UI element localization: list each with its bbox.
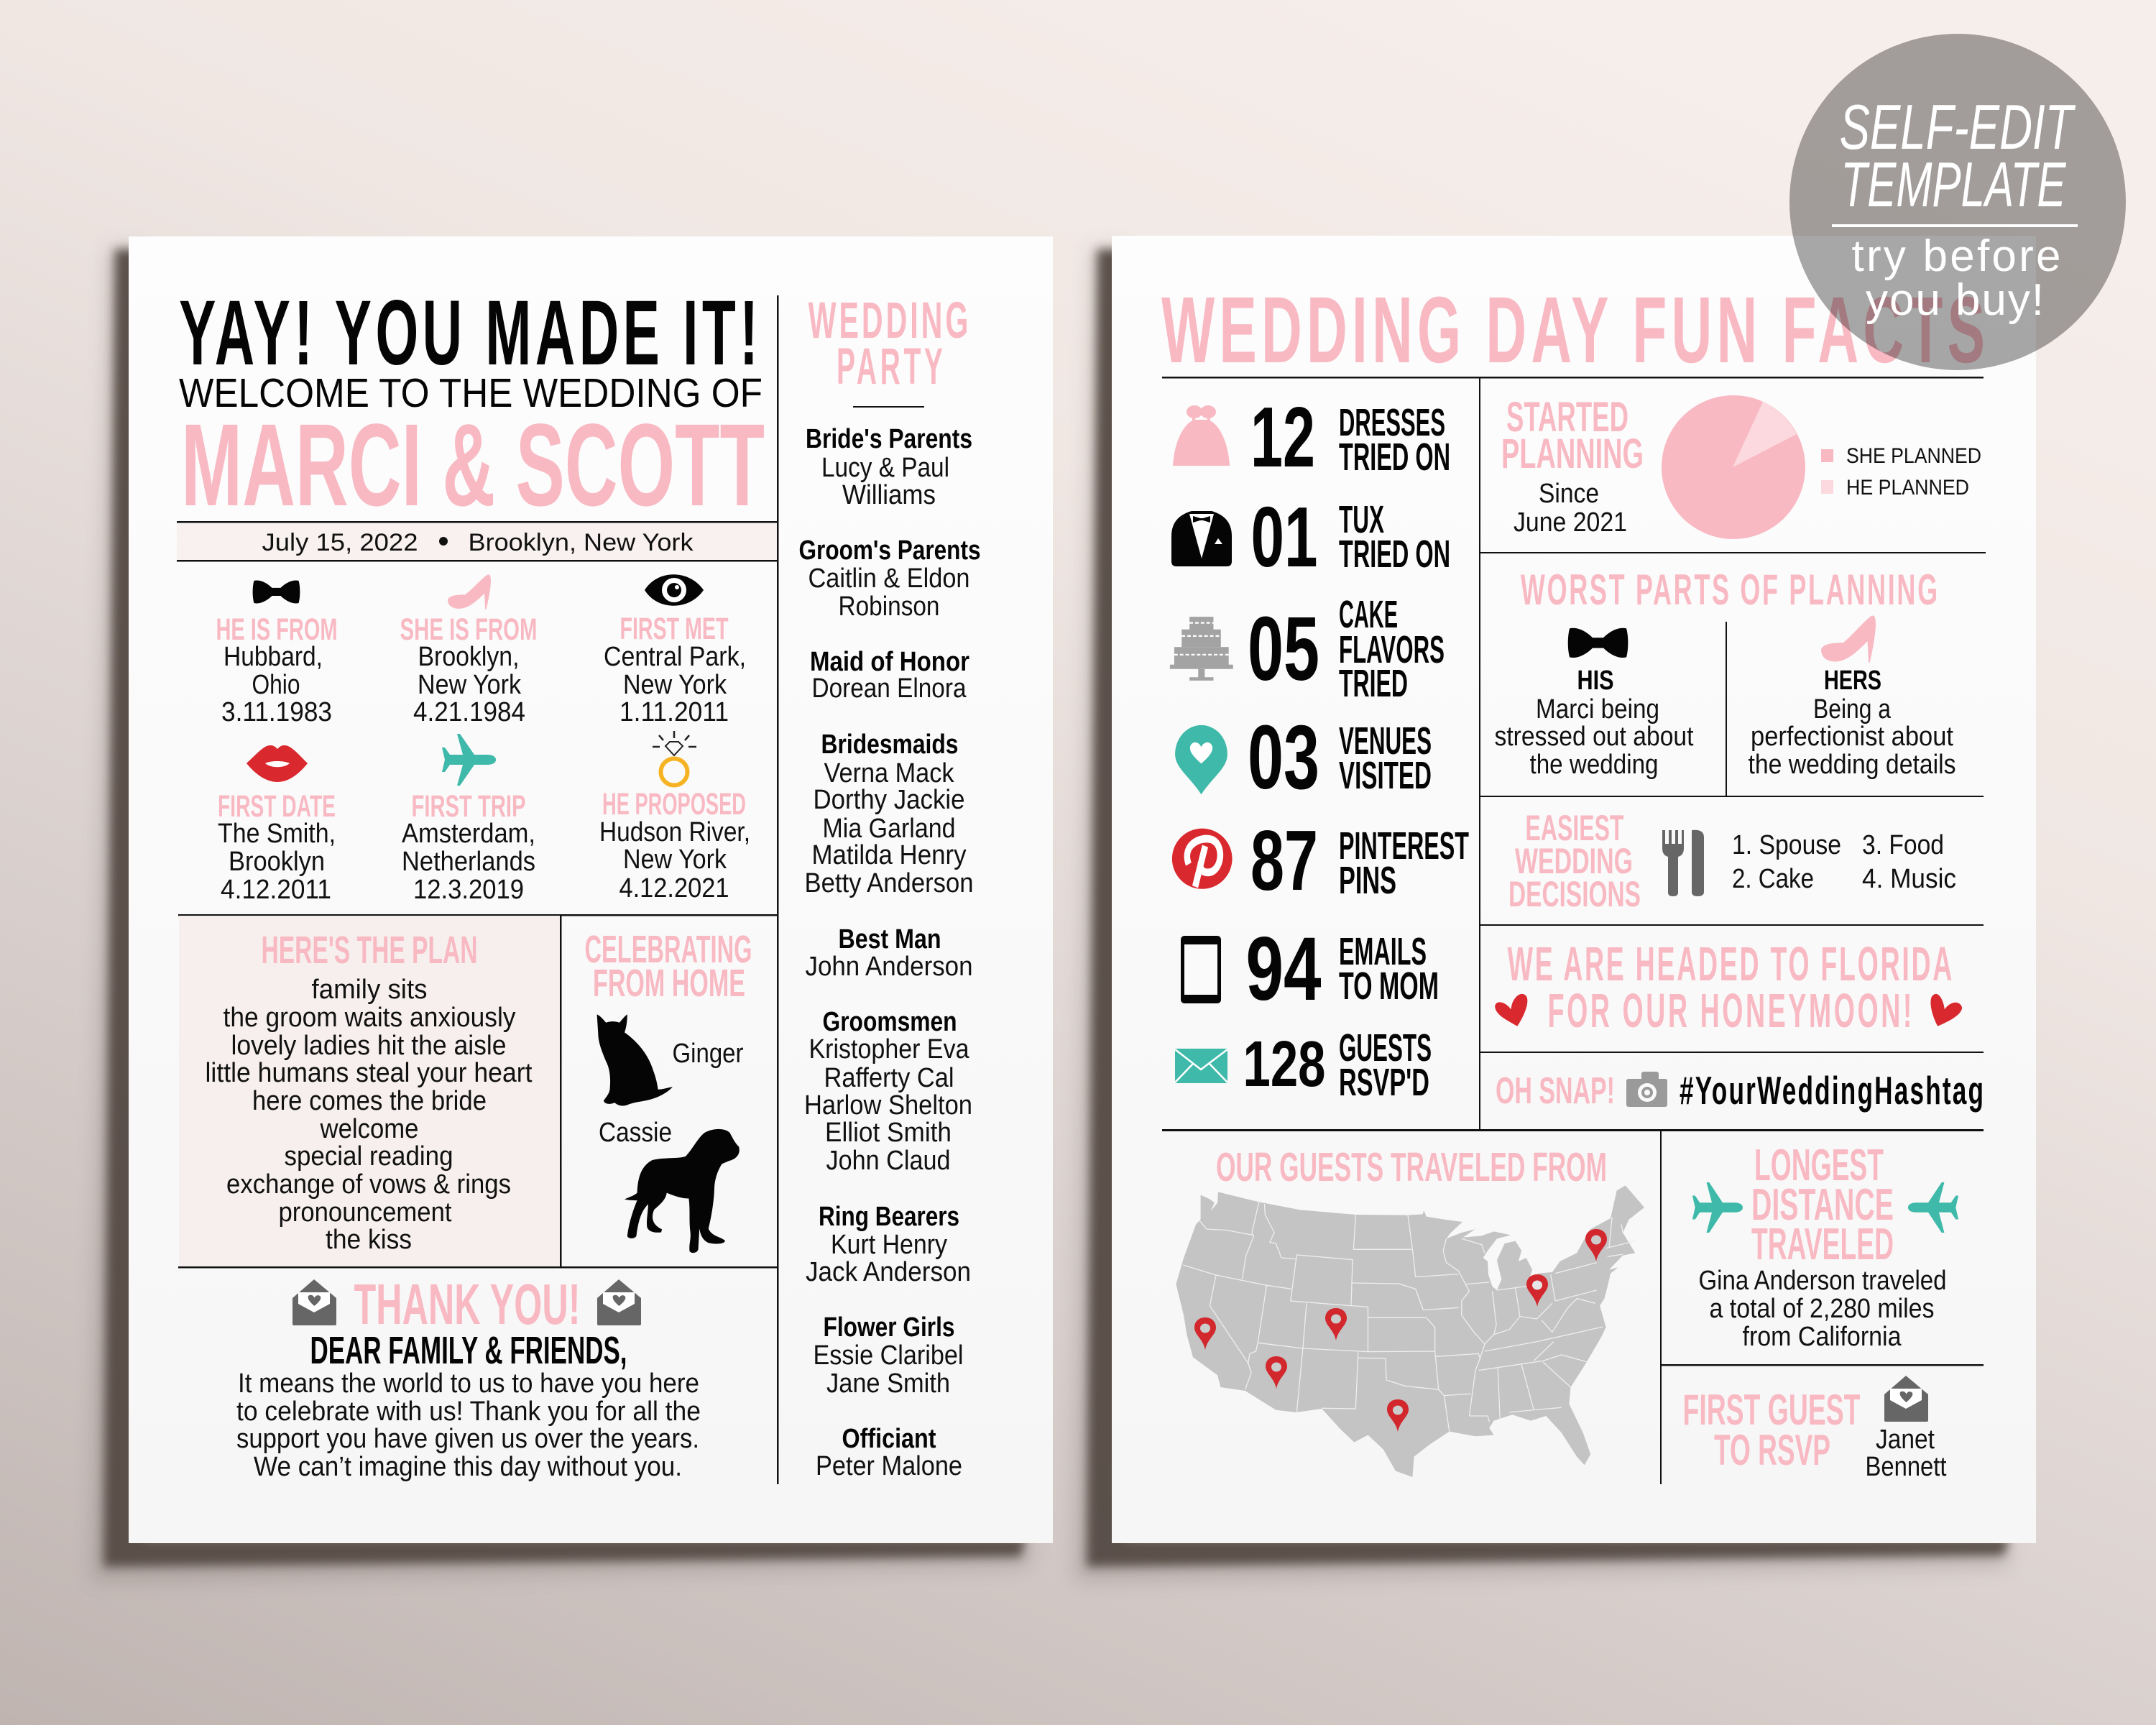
panel: celebrating from home: Cassie: [599, 1118, 672, 1148]
stat: emails to mom: 94: [1246, 919, 1321, 1019]
stat: emails to mom: TO MOM: [1339, 965, 1439, 1008]
facts: he is from: HE IS FROM: [216, 612, 338, 647]
facts: first date: FIRST DATE: [218, 789, 336, 824]
title block: MARCI & SCOTT: [181, 399, 765, 530]
panel: wedding party: Ring Bearers: [819, 1202, 959, 1232]
panel: wedding party: Jack Anderson: [806, 1257, 971, 1287]
facts: she is from: SHE IS FROM: [400, 612, 538, 647]
map pin: arizona: [1266, 1356, 1287, 1389]
stat: cake flavors tried: 05: [1248, 598, 1319, 699]
map pin: colorado: [1325, 1308, 1347, 1340]
panel: here's the plan: welcome: [320, 1114, 418, 1144]
facts: he is from: 3.11.1983: [221, 697, 332, 727]
panel: our guests traveled from: [1176, 1144, 1644, 1477]
panel: easiest wedding decisions: WEDDING: [1515, 841, 1633, 881]
panel: thank you note: THANK YOU!: [354, 1272, 581, 1336]
icon: phone: [1181, 936, 1221, 1003]
icon: high heel: [448, 574, 491, 610]
panel: worst parts of planning: HIS: [1577, 666, 1614, 696]
panel: wedding party: [799, 292, 980, 1481]
panel: thank you note: We can’t imagine this day without you.: [254, 1452, 682, 1482]
panel: honeymoon callout: [1495, 937, 1962, 1038]
facts: he is from: Hubbard,: [224, 642, 323, 672]
icon: camera: [1626, 1072, 1667, 1107]
icon: dress: [1173, 405, 1230, 466]
panel: here's the plan: pronouncement: [279, 1197, 452, 1228]
panel: worst parts of planning: [1495, 566, 1956, 780]
panel: our guests traveled from: OUR GUESTS TRAVELED FROM: [1216, 1144, 1607, 1190]
panel: wedding party: Bride's Parents: [806, 424, 972, 454]
panel: honeymoon callout: WE ARE HEADED TO FLORIDA: [1508, 937, 1952, 991]
panel: wedding party: WEDDING: [808, 292, 968, 349]
facts: first date: Brooklyn: [229, 847, 325, 877]
panel: wedding party: John Claud: [826, 1146, 950, 1176]
left paper sheet: [129, 236, 1053, 1543]
stat: cake flavors tried: FLAVORS: [1339, 628, 1445, 671]
panel: here's the plan: little humans steal your heart: [206, 1058, 533, 1088]
panel: worst parts of planning: the wedding: [1529, 750, 1659, 780]
panel: wedding party: Dorthy Jackie: [814, 785, 964, 815]
icon: high heel: [1821, 615, 1876, 663]
map of the united states: [1176, 1185, 1644, 1477]
panel: wedding party: Kurt Henry: [831, 1230, 947, 1260]
title block: WELCOME TO THE WEDDING OF: [179, 370, 763, 416]
facts: first date: 4.12.2011: [221, 875, 331, 905]
icon: bow tie: [1568, 628, 1628, 658]
panel: thank you note: [236, 1272, 701, 1482]
icon: wedding cake: [1170, 617, 1233, 681]
facts: she is from: New York: [418, 670, 522, 700]
panel: here's the plan: family sits: [312, 975, 427, 1005]
title block: YAY! YOU MADE IT!: [179, 282, 758, 385]
date and location band: July 15, 2022: [262, 529, 418, 556]
panel: wedding party: PARTY: [837, 339, 943, 395]
icon: airplane: [442, 734, 496, 786]
stat: dresses tried on: TRIED ON: [1339, 436, 1450, 479]
panel: wedding party: Essie Claribel: [814, 1340, 963, 1371]
stat: tux tried on: TRIED ON: [1339, 533, 1450, 576]
pie chart: [1662, 395, 1805, 539]
panel: wedding party: Kristopher Eva: [809, 1034, 969, 1064]
stat: venues visited: [1175, 707, 1432, 808]
map pin: ohio: [1526, 1274, 1548, 1307]
panel: wedding party: Mia Garland: [822, 814, 956, 844]
facts: first met: New York: [623, 670, 727, 700]
panel: wedding party: Elliot Smith: [825, 1118, 952, 1148]
panel: here's the plan: the kiss: [326, 1225, 412, 1255]
facts: first met: Central Park,: [604, 642, 746, 672]
title: wedding day fun facts: WEDDING DAY FUN FACTS: [1161, 277, 1985, 382]
stat: guests rsvp'd: GUESTS: [1339, 1026, 1432, 1070]
right paper sheet: [1112, 236, 2036, 1543]
badge: self-edit template: [1789, 34, 2126, 370]
panel: worst parts of planning: HERS: [1824, 666, 1881, 696]
panel: longest distance traveled: DISTANCE: [1751, 1180, 1894, 1230]
panel: wedding party: Officiant: [842, 1424, 936, 1454]
panel: wedding party: Verna Mack: [824, 758, 954, 788]
facts: he proposed: Hudson River,: [599, 817, 750, 847]
stat: dresses tried on: DRESSES: [1339, 401, 1445, 444]
stat: tux tried on: [1171, 489, 1450, 585]
icon: cat silhouette: [597, 1014, 673, 1105]
stat: dresses tried on: [1173, 390, 1450, 485]
panel: first guest to rsvp: TO RSVP: [1714, 1426, 1830, 1474]
icon: pinterest logo: [1172, 829, 1233, 889]
panel: honeymoon callout: FOR OUR HONEYMOON!: [1548, 984, 1912, 1038]
panel: wedding party: Robinson: [838, 592, 940, 622]
panel: celebrating from home: Ginger: [673, 1039, 744, 1069]
panel: easiest wedding decisions: EASIEST: [1525, 808, 1624, 848]
map pin: new york: [1585, 1229, 1607, 1261]
map pin: california: [1194, 1317, 1216, 1350]
panel: first guest to rsvp: Janet: [1876, 1425, 1935, 1455]
panel: here's the plan: the groom waits anxiously: [223, 1003, 516, 1033]
pie legend: SHE PLANNED: [1846, 444, 1981, 468]
panel: thank you note: It means the world to us to have you here: [238, 1368, 699, 1399]
panel: celebrating from home: [585, 928, 752, 1253]
panel: wedding party: Best Man: [838, 924, 941, 954]
panel: first guest to rsvp: FIRST GUEST: [1683, 1386, 1860, 1434]
panel: longest distance traveled: LONGEST: [1754, 1141, 1884, 1190]
icon: mail envelope: [1175, 1049, 1227, 1083]
panel: wedding party: Harlow Shelton: [804, 1090, 972, 1121]
panel: longest distance traveled: [1692, 1141, 1958, 1352]
icon: airplane right-facing: [1692, 1182, 1743, 1233]
icon: envelope: [1884, 1376, 1928, 1422]
stat: venues visited: 03: [1248, 707, 1319, 808]
panel: thank you note: support you have given us over the years.: [236, 1424, 699, 1454]
icon: eye: [645, 574, 704, 606]
panel: first guest to rsvp: Bennett: [1866, 1452, 1947, 1482]
facts: first met: 1.11.2011: [619, 697, 729, 727]
panel: wedding party: Dorean Elnora: [812, 673, 967, 704]
icon: envelope left: [292, 1279, 336, 1325]
stat: cake flavors tried: TRIED: [1339, 662, 1408, 705]
stat: tux tried on: 01: [1250, 489, 1318, 585]
stat: guests rsvp'd: RSVP'D: [1339, 1061, 1429, 1104]
facts: he proposed: HE PROPOSED: [602, 787, 746, 822]
panel: started planning: PLANNING: [1501, 431, 1644, 477]
stat: guests rsvp'd: [1175, 1026, 1432, 1104]
panel: wedding party: Peter Malone: [816, 1451, 962, 1481]
stat: guests rsvp'd: 128: [1243, 1029, 1325, 1100]
facts: he proposed: New York: [623, 845, 727, 875]
panel: longest distance traveled: a total of 2,280 miles: [1709, 1294, 1935, 1324]
panel: longest distance traveled: TRAVELED: [1751, 1220, 1894, 1269]
panel: here's the plan: lovely ladies hit the aisle: [231, 1031, 506, 1061]
badge: self-edit template: SELF-EDIT: [1840, 91, 2076, 162]
panel: longest distance traveled: Gina Anderson traveled: [1699, 1266, 1946, 1296]
icon: right heart: [1930, 994, 1962, 1026]
panel: wedding party: Williams: [842, 480, 936, 510]
page dividers: [178, 295, 779, 1484]
stat: emails to mom: [1181, 919, 1439, 1019]
panel: easiest wedding decisions: DECISIONS: [1508, 874, 1641, 914]
pie legend: HE PLANNED: [1846, 476, 1969, 500]
facts: first date: [218, 745, 336, 905]
panel: here's the plan: HERE'S THE PLAN: [262, 929, 477, 972]
panel: wedding party: Matilda Henry: [812, 840, 966, 870]
panel: worst parts of planning: the wedding details: [1748, 750, 1956, 780]
stat: cake flavors tried: CAKE: [1339, 593, 1398, 636]
panel: started planning: [1501, 394, 1981, 539]
title block: [179, 282, 765, 530]
stat: pinterest pins: PINS: [1339, 859, 1396, 902]
stat: dresses tried on: 12: [1250, 390, 1315, 485]
facts: he proposed: 4.12.2021: [619, 873, 729, 903]
panel: started planning: Since: [1539, 479, 1599, 509]
icon: location heart pin: [1175, 725, 1227, 794]
icon: lips: [247, 745, 308, 782]
icon: airplane left-facing: [1908, 1182, 1958, 1233]
panel: easiest wedding decisions: 4. Music: [1862, 864, 1956, 894]
icon: diamond ring: [653, 731, 696, 785]
stat: pinterest pins: 87: [1250, 813, 1318, 908]
stat: emails to mom: EMAILS: [1339, 930, 1427, 973]
facts: first met: [604, 574, 746, 727]
panel: wedding party: Jane Smith: [826, 1368, 950, 1399]
panel: oh snap hashtag: #YourWeddingHashtag: [1680, 1068, 1984, 1113]
panel: easiest wedding decisions: 1. Spouse: [1732, 830, 1841, 860]
panel: oh snap hashtag: OH SNAP!: [1496, 1070, 1615, 1112]
panel: here's the plan: special reading: [285, 1141, 453, 1172]
badge: self-edit template: you buy!: [1866, 275, 2044, 325]
panel: started planning: STARTED: [1506, 394, 1628, 441]
left wedding program page: [129, 236, 1053, 1543]
facts: first trip: 12.3.2019: [413, 875, 524, 905]
facts: she is from: Brooklyn,: [418, 642, 519, 672]
date and location band: Brooklyn, New York: [469, 529, 694, 556]
facts: first trip: FIRST TRIP: [411, 789, 526, 824]
panel: worst parts of planning: Being a: [1813, 694, 1892, 724]
panel: easiest wedding decisions: [1508, 808, 1956, 914]
panel: wedding party: Lucy & Paul: [821, 453, 949, 483]
panel: wedding party: Maid of Honor: [810, 647, 969, 677]
facts: first trip: Netherlands: [402, 847, 535, 877]
panel: worst parts of planning: perfectionist about: [1751, 722, 1953, 752]
stat: pinterest pins: PINTEREST: [1339, 824, 1469, 868]
panel: first guest to rsvp: [1683, 1376, 1947, 1482]
panel: thank you note: to celebrate with us! Thank you for all the: [236, 1397, 701, 1427]
facts: she is from: [400, 574, 538, 727]
stat: venues visited: VISITED: [1339, 754, 1432, 797]
stat: venues visited: VENUES: [1339, 719, 1432, 763]
facts: he is from: Ohio: [252, 670, 300, 700]
facts: first trip: [402, 734, 535, 905]
badge: self-edit template: try before: [1851, 231, 2061, 281]
panel: thank you note: DEAR FAMILY & FRIENDS,: [310, 1329, 627, 1372]
page shadows: [92, 248, 2012, 1581]
icon: bow tie: [253, 580, 300, 603]
panel: longest distance traveled: from California: [1742, 1322, 1902, 1352]
panel: oh snap hashtag: [1496, 1068, 1984, 1113]
panel: started planning: June 2021: [1514, 507, 1627, 538]
map pin: texas: [1387, 1399, 1409, 1432]
right fun facts page: [1112, 236, 2036, 1543]
panel: wedding party: Flower Girls: [824, 1312, 954, 1343]
facts: first trip: Amsterdam,: [402, 819, 535, 849]
page grid lines: [1162, 377, 1986, 1484]
facts: he proposed: [599, 731, 750, 903]
panel: wedding party: Bridesmaids: [821, 730, 959, 760]
panel: celebrating from home: FROM HOME: [593, 962, 745, 1005]
stat: cake flavors tried: [1170, 593, 1445, 705]
icon: dog silhouette: [625, 1129, 740, 1253]
icon: left heart: [1495, 994, 1527, 1026]
panel: wedding party: Groomsmen: [822, 1007, 957, 1037]
panel: wedding party: Caitlin & Eldon: [808, 564, 970, 594]
panel: easiest wedding decisions: 2. Cake: [1732, 864, 1814, 894]
panel: wedding party: Groom's Parents: [799, 535, 980, 566]
panel: here's the plan: here comes the bride: [252, 1086, 487, 1116]
facts: first met: FIRST MET: [619, 612, 729, 646]
panel: easiest wedding decisions: 3. Food: [1862, 830, 1944, 860]
panel: wedding party: Rafferty Cal: [824, 1063, 954, 1093]
stat: pinterest pins: [1172, 813, 1469, 908]
panel: here's the plan: [179, 916, 560, 1266]
facts: he is from: [216, 580, 338, 727]
panel: wedding party: Betty Anderson: [805, 868, 973, 898]
panel: celebrating from home: CELEBRATING: [585, 928, 752, 971]
panel: wedding party: John Anderson: [805, 952, 973, 982]
facts: first date: The Smith,: [218, 819, 336, 849]
icon: fork and knife: [1662, 830, 1704, 896]
panel: worst parts of planning: Marci being: [1536, 694, 1659, 724]
stat: tux tried on: TUX: [1339, 498, 1384, 541]
icon: envelope right: [597, 1279, 641, 1325]
panel: worst parts of planning: WORST PARTS OF PLANNING: [1521, 566, 1938, 614]
pie legend: [1821, 444, 1981, 500]
date and location band: [177, 521, 778, 562]
panel: here's the plan: exchange of vows & rings: [226, 1169, 511, 1200]
facts: she is from: 4.21.1984: [413, 697, 525, 727]
panel: worst parts of planning: stressed out about: [1495, 722, 1694, 752]
icon: tuxedo: [1171, 511, 1232, 566]
